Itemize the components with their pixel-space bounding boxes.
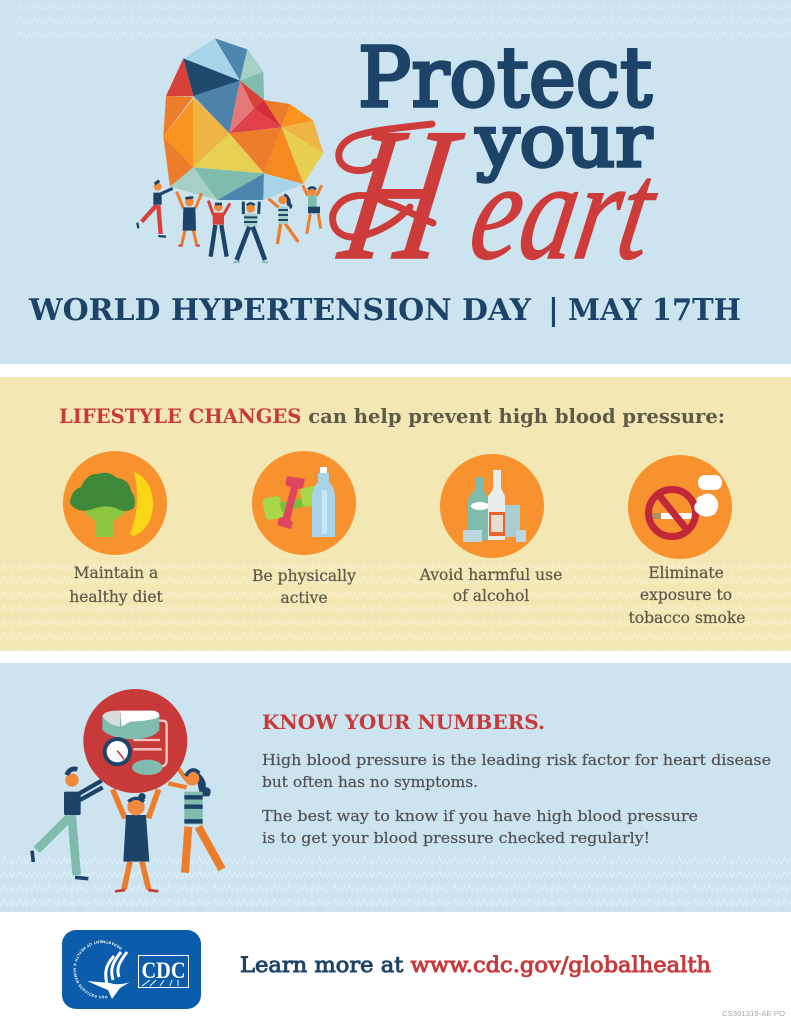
centre person	[113, 789, 159, 891]
label: alcohol: Avoid harmful use	[419, 566, 562, 584]
title: Protect your Heart: Protect	[358, 31, 652, 126]
text: get checked paragraph: is to get your blood pressure checked regularly!	[262, 829, 650, 847]
heading: know your numbers: KNOW YOUR NUMBERS.	[262, 710, 545, 734]
subtitle: world hypertension day: MAY 17TH	[568, 293, 741, 328]
label: physically active: Be physically	[252, 567, 356, 585]
title: Protect your Heart: your	[475, 99, 653, 183]
text: get checked paragraph: The best way to know if you have high blood pressure	[262, 807, 698, 825]
person 5	[268, 195, 298, 244]
title: Protect your Heart: eart	[461, 133, 669, 289]
label: healthy diet: healthy diet	[69, 588, 164, 606]
icon: no smoking	[628, 455, 732, 559]
person 3	[208, 201, 230, 257]
logo: HHS and CDC	[62, 930, 201, 1009]
label: tobacco smoke: Eliminate	[648, 564, 724, 582]
logo: HHS and CDC: CDC	[142, 958, 186, 983]
text: risk factor paragraph: but often has no symptoms.	[262, 773, 478, 791]
heading: lifestyle changes: LIFESTYLE CHANGES can help prevent high blood pressure:	[59, 404, 725, 428]
person 6	[303, 185, 322, 234]
people lifting the heart	[137, 181, 322, 263]
icon: monitor circle	[83, 689, 187, 793]
panel: know your numbers	[0, 663, 791, 912]
person 4	[233, 202, 268, 263]
label: tobacco smoke: exposure to	[640, 586, 732, 604]
label: healthy diet: Maintain a	[74, 564, 158, 582]
label: tobacco smoke: tobacco smoke	[629, 609, 745, 627]
label: physically active: active	[280, 589, 328, 607]
title: Protect your Heart	[327, 31, 677, 300]
right person	[168, 768, 222, 873]
illustration: three people lifting blood pressure monitor	[32, 689, 222, 891]
icon: healthy diet	[63, 451, 167, 555]
icon: alcohol	[440, 454, 544, 558]
person 2	[177, 192, 202, 246]
panel: lifestyle changes	[0, 377, 791, 651]
icon: polygon heart	[163, 38, 323, 200]
panel: header	[0, 0, 791, 364]
text: risk factor paragraph: High blood pressure is the leading risk factor for heart disease	[262, 751, 771, 769]
subtitle: world hypertension day: WORLD HYPERTENSION DAY	[28, 293, 532, 328]
panel: footer	[62, 930, 786, 1018]
label: alcohol: of alcohol	[453, 587, 529, 605]
logo: HHS and CDC: DEPARTMENT OF HEALTH & HUMAN SERVICES USA	[73, 940, 122, 998]
person 1	[137, 181, 173, 237]
icon: physically active	[252, 451, 356, 555]
left person	[32, 769, 103, 879]
text: publication code: CS301319-AE PO	[722, 1011, 786, 1018]
title: Protect your Heart: H	[327, 89, 473, 300]
text: learn more: Learn more at www.cdc.gov/globalhealth	[240, 953, 711, 977]
subtitle: world hypertension day: |	[548, 293, 559, 328]
